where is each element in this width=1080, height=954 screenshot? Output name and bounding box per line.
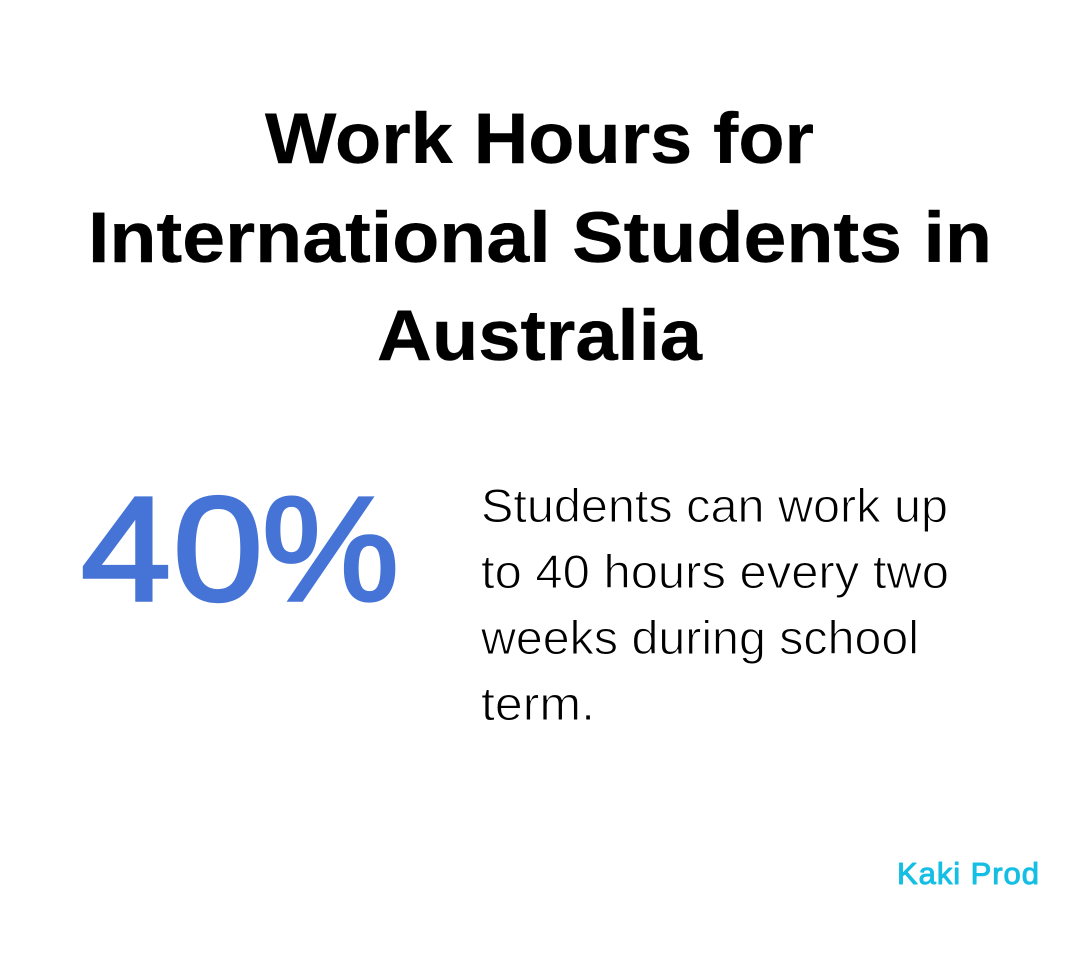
big statistic: 40%: % — [262, 467, 399, 632]
title: International Students in — [88, 199, 992, 278]
title — [88, 100, 992, 376]
statistic description: Students can work up — [481, 479, 948, 532]
big statistic: 40% — [81, 467, 399, 632]
title: Australia — [377, 297, 703, 376]
statistic description: to 40 hours every two — [481, 545, 949, 598]
title: Work Hours for — [265, 100, 814, 179]
statistic description: term. — [481, 677, 595, 730]
logo: Kaki Prod: Kaki Prod — [897, 856, 1039, 891]
statistic description — [480, 479, 949, 730]
statistic description: weeks during school — [480, 611, 919, 664]
big statistic: 40%: 0 — [173, 467, 263, 632]
big statistic: 40%: 4 — [81, 467, 171, 632]
